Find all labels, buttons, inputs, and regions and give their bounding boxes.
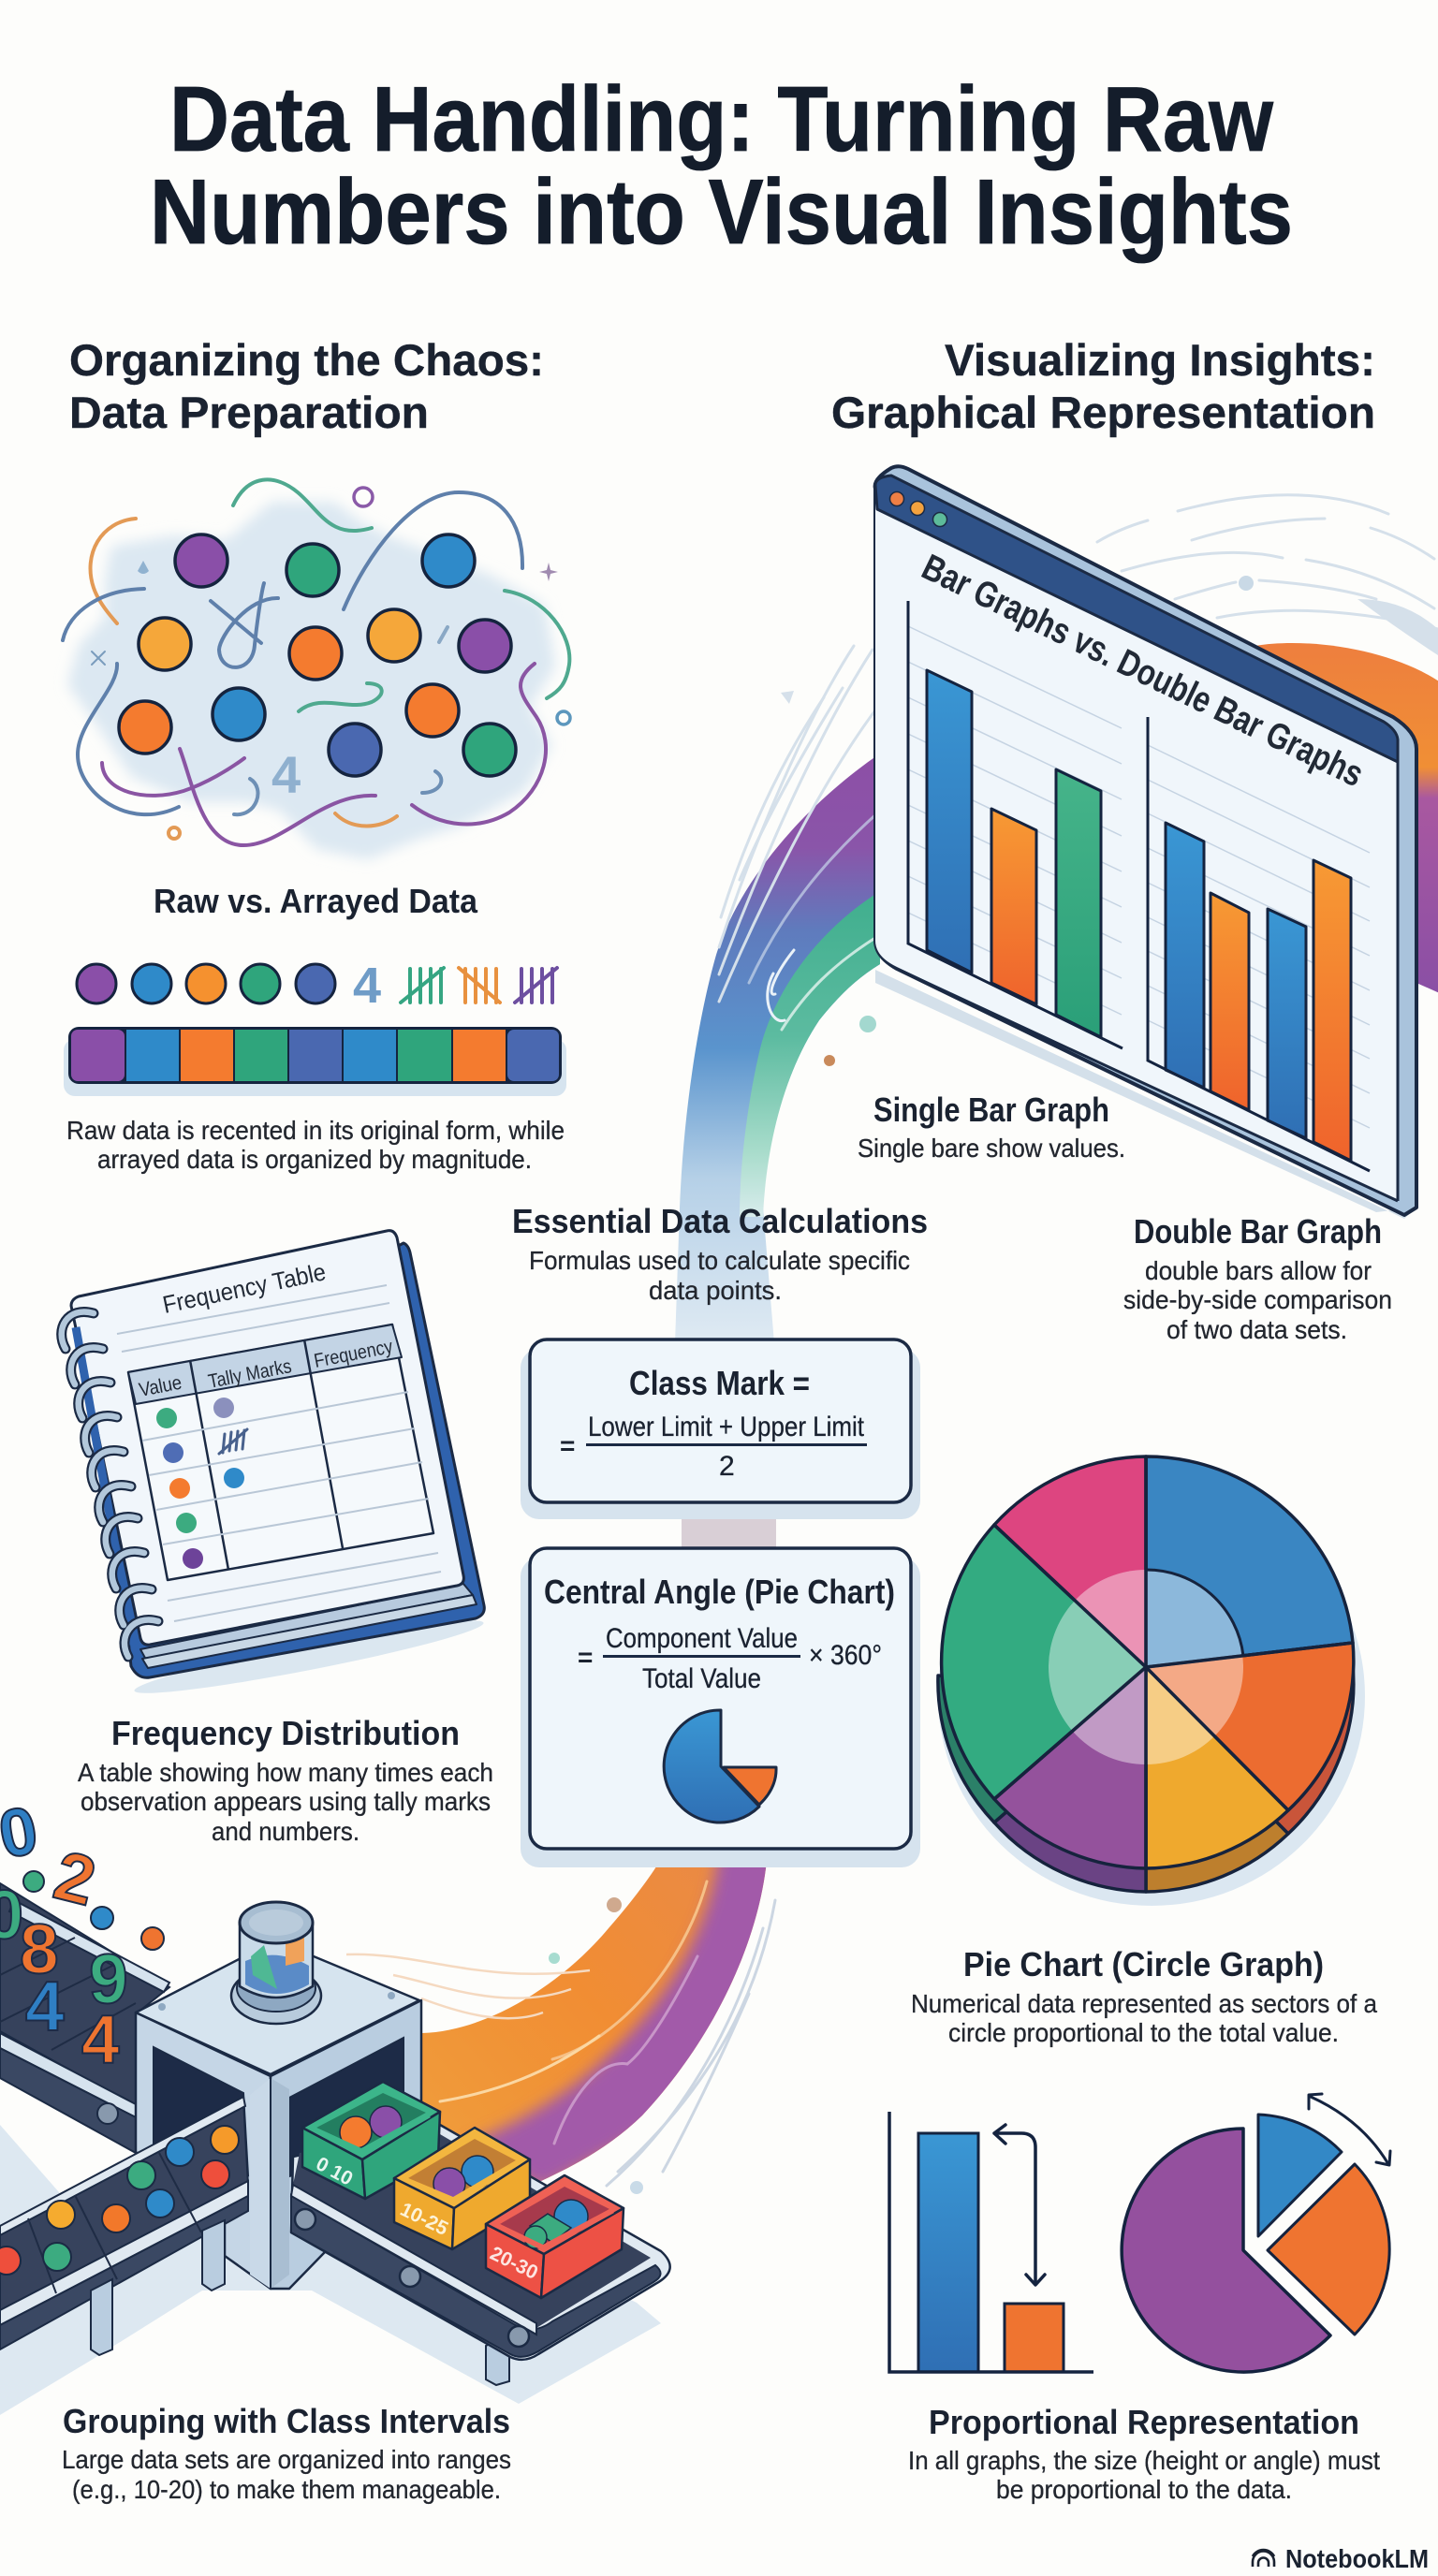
single bar graph: [908, 601, 1123, 1048]
text: pie chart: circle proportional to the total value.: [948, 2018, 1339, 2047]
text: proportional representation: [908, 2403, 1380, 2504]
ripple lines around the window: [719, 495, 1438, 1002]
text: essential data calculations: Formulas used to calculate specific: [529, 1246, 910, 1275]
text: frequency distribution: Frequency Distribution: [111, 1714, 460, 1752]
text: grouping with class intervals: Grouping with Class Intervals: [63, 2402, 510, 2440]
green bin: 0 10: [313, 2153, 357, 2190]
floor shadow: [0, 2125, 661, 2415]
text: double bar graph: Double Bar Graph: [1134, 1212, 1382, 1251]
text: double bar graph: [1123, 1212, 1392, 1344]
heading: data preparation: Organizing the Chaos:: [69, 335, 544, 385]
panel: central angle formula: [521, 1548, 920, 1867]
panel: central angle formula: × 360°: [809, 1640, 882, 1671]
heading: data preparation: Data Preparation: [69, 388, 429, 437]
frequency table grid: Value: [138, 1372, 183, 1401]
falling numbers: 2: [47, 1836, 103, 1921]
text: frequency distribution: observation appears using tally marks: [81, 1787, 491, 1816]
glass hopper: [231, 1902, 321, 2024]
text: frequency distribution: A table showing how many times each: [78, 1758, 493, 1787]
title: Numbers into Visual Insights: [150, 160, 1293, 263]
lower conveyor belt with balls: [0, 2097, 248, 2355]
text: frequency distribution: and numbers.: [212, 1817, 360, 1846]
small pie icon: [664, 1710, 776, 1822]
panel: central angle formula: =: [578, 1643, 593, 1672]
heading: graphical representation: [831, 335, 1375, 437]
notebook title: Frequency Table: [160, 1257, 328, 1319]
frequency table grid: Tally Marks: [207, 1355, 293, 1393]
illustration: chaotic raw data cloud: 4: [271, 745, 301, 804]
panel: class mark formula: =: [560, 1431, 575, 1460]
machine body: [136, 1940, 421, 2289]
amber bin: [394, 2128, 530, 2249]
text: double bar graph: side-by-side comparison: [1123, 1285, 1392, 1314]
text: pie chart: [911, 1945, 1377, 2047]
text: grouping with class intervals: [62, 2402, 511, 2504]
text: double bar graph: double bars allow for: [1145, 1256, 1372, 1285]
frequency table grid: Frequency: [313, 1336, 395, 1372]
text: raw vs arrayed description: Raw data is recented in its original form, while: [66, 1116, 565, 1145]
text: frequency distribution: [78, 1714, 493, 1846]
decorative dots near the bar graph: [824, 1016, 876, 1066]
ribbon link between formula boxes: [682, 1502, 776, 1559]
heading: graphical representation: Visualizing Insights:: [945, 335, 1375, 385]
chart: proportional bars: [889, 2112, 1093, 2372]
text: proportional representation: In all graphs, the size (height or angle) must: [908, 2446, 1380, 2475]
double bar graph: [1148, 717, 1370, 1171]
upper conveyor belt: [0, 1883, 169, 2153]
pie chart: circle graph: [938, 1456, 1365, 1906]
text: raw vs arrayed heading: Raw vs. Arrayed Data: [154, 882, 478, 920]
text: raw vs arrayed description: [66, 1116, 565, 1174]
chart: proportional pie: [1122, 2094, 1390, 2372]
text: proportional representation: Proportional Representation: [929, 2403, 1359, 2441]
connecting ribbon: upper arc: [675, 643, 1438, 1343]
text: grouping with class intervals: Large data sets are organized into ranges: [62, 2445, 511, 2474]
panel: class mark formula: 2: [719, 1451, 735, 1482]
text: essential data calculations: data points.: [649, 1276, 782, 1305]
falling numbers: 4: [81, 2002, 120, 2078]
panel: central angle formula: Total Value: [642, 1663, 761, 1694]
text: essential data calculations: Essential Data Calculations: [512, 1202, 928, 1240]
spiral binding: [62, 1311, 158, 1657]
text: essential data calculations: [512, 1202, 928, 1305]
falling numbers: 8: [20, 1910, 59, 1988]
arrow: angle comparison: [1309, 2094, 1390, 2165]
text: single bar graph: [858, 1090, 1125, 1163]
text: single bar graph: Single bare show values.: [858, 1134, 1125, 1163]
heading: data preparation: [69, 335, 544, 437]
title: [150, 67, 1293, 263]
icons: raw data row: 4: [353, 958, 381, 1014]
heading: graphical representation: Graphical Representation: [831, 388, 1375, 437]
falling numbers: [0, 1793, 164, 2078]
panel: class mark formula: [521, 1339, 920, 1519]
text: double bar graph: of two data sets.: [1167, 1315, 1347, 1344]
arrayed data bar: [64, 1027, 566, 1096]
red bin: [486, 2175, 624, 2298]
panel: class mark formula: Lower Limit + Upper Limit: [588, 1412, 865, 1442]
illustration: chaotic raw data cloud: [63, 479, 570, 850]
green bin: [302, 2082, 440, 2199]
text: pie chart: Pie Chart (Circle Graph): [963, 1945, 1324, 1983]
bar graph window: [875, 466, 1416, 1219]
text: raw vs arrayed description: arrayed data is organized by magnitude.: [97, 1145, 532, 1174]
panel: central angle formula: Component Value: [606, 1623, 798, 1654]
notebook: frequency table: [62, 1231, 486, 1704]
text: single bar graph: Single Bar Graph: [873, 1090, 1109, 1129]
text: pie chart: Numerical data represented as sectors of a: [911, 1989, 1377, 2018]
icons: raw data row: [77, 958, 557, 1014]
frequency table grid: [128, 1325, 433, 1580]
title: Data Handling: Turning Raw: [169, 67, 1274, 170]
panel: central angle formula: Central Angle (Pie Chart): [544, 1573, 895, 1611]
connecting ribbon: lower arc: [346, 1849, 777, 2194]
red bin: 20-30: [487, 2243, 541, 2284]
text: proportional representation: be proportional to the data.: [996, 2475, 1292, 2504]
falling numbers: 4: [25, 1967, 65, 2045]
falling numbers: 9: [89, 1939, 128, 2018]
arrow: height comparison: [994, 2125, 1045, 2285]
panel: class mark formula: Class Mark =: [629, 1364, 810, 1402]
amber bin: 10-25: [397, 2199, 451, 2240]
text: grouping with class intervals: (e.g., 10-20) to make them manageable.: [72, 2475, 501, 2504]
conveyor machine illustration: [0, 1793, 670, 2415]
right conveyor belt: [291, 2125, 670, 2385]
